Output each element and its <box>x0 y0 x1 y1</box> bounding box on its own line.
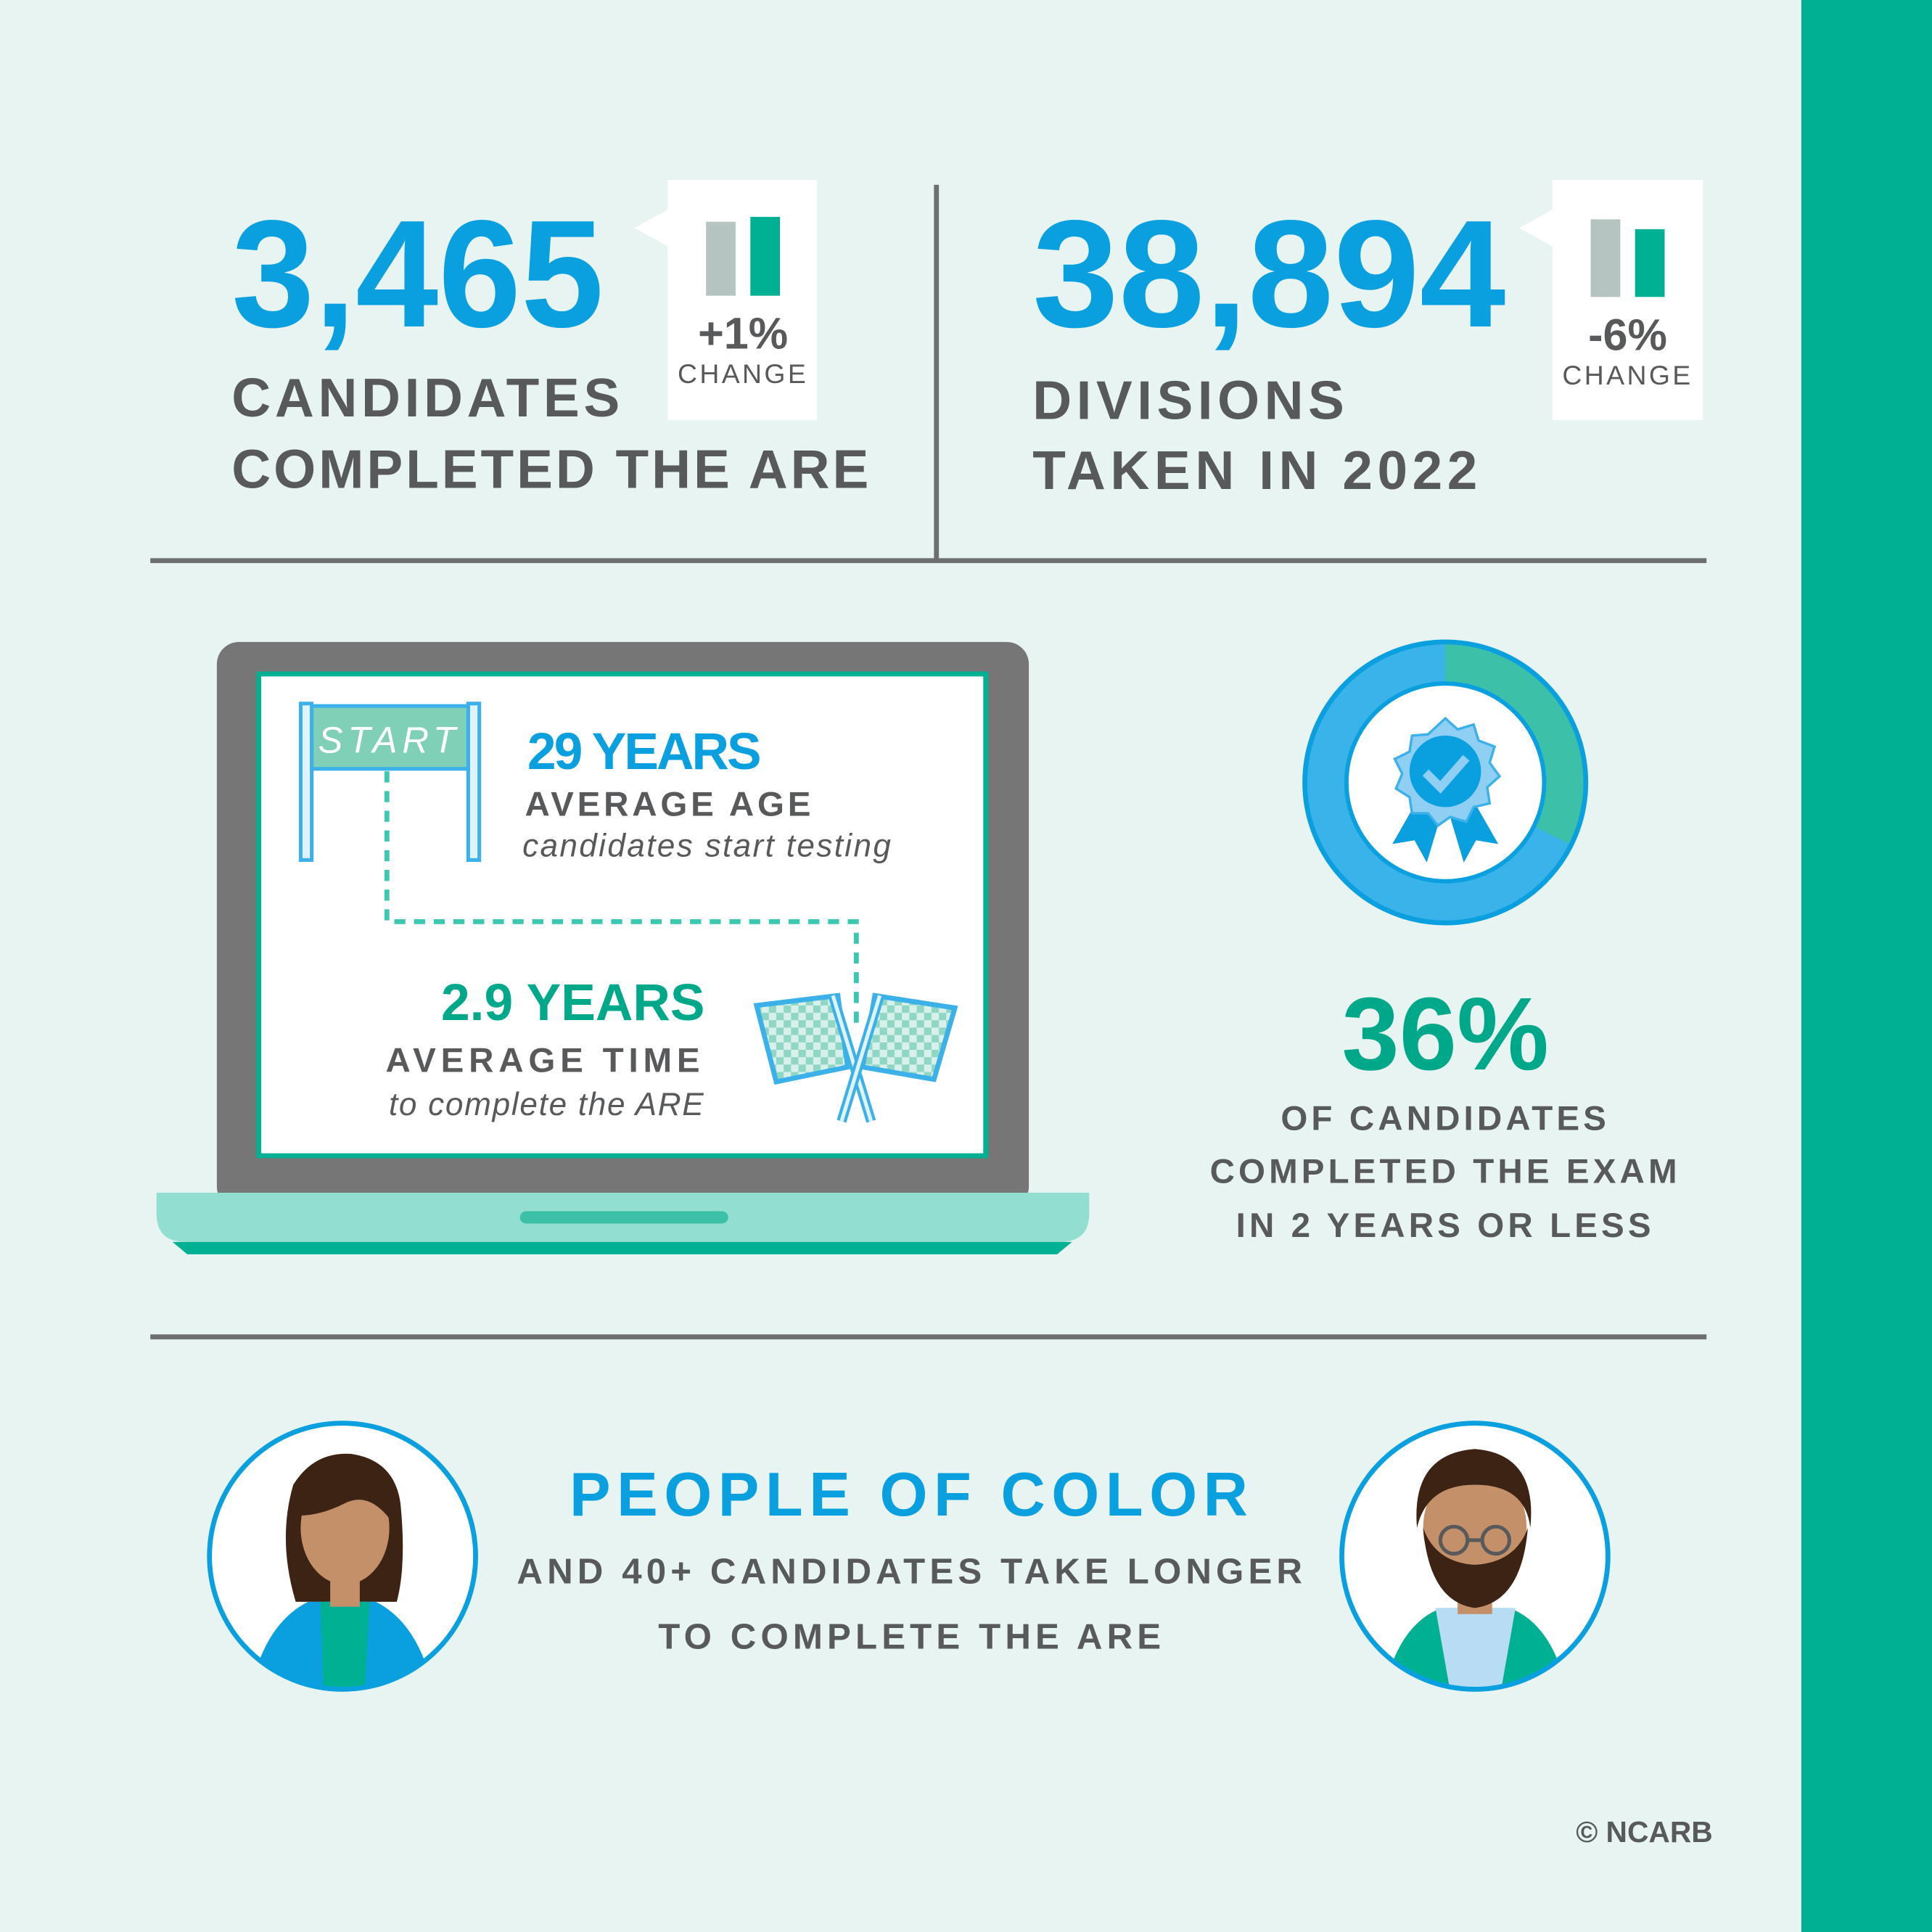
laptop <box>157 642 1089 1254</box>
text: 2.9 years <box>386 974 704 1122</box>
icon: start banner: START <box>318 720 461 761</box>
icon: woman avatar <box>210 1423 476 1713</box>
stat: candidates: COMPLETED THE ARE <box>231 439 875 500</box>
callout: +1% change <box>635 180 817 420</box>
callout: -6% change: -6% <box>1588 310 1667 359</box>
stat: candidates: CANDIDATES <box>231 367 626 428</box>
stat: divisions: TAKEN IN 2022 <box>1032 440 1484 501</box>
text: 29 years <box>522 723 892 863</box>
right green strip <box>1801 0 1932 1932</box>
text: 2.9 years: 2.9 YEARS <box>441 974 704 1032</box>
text: 29 years: 29 YEARS <box>527 723 762 781</box>
text: people of color: PEOPLE OF COLOR <box>570 1460 1254 1529</box>
icon: man avatar <box>1341 1423 1608 1713</box>
stat: divisions: 38,894 <box>1032 188 1505 359</box>
dashed path <box>387 771 856 1023</box>
text: people of color: AND 40+ CANDIDATES TAKE LONGER <box>517 1551 1307 1591</box>
text: 29 years: candidates start testing <box>522 828 892 863</box>
icon: award badge <box>1392 718 1500 863</box>
text: 29 years: AVERAGE AGE <box>525 785 815 823</box>
text: 36% of candidates: OF CANDIDATES <box>1281 1099 1610 1138</box>
text: 36% of candidates: COMPLETED THE EXAM <box>1210 1152 1681 1191</box>
text: 36% of candidates: IN 2 YEARS OR LESS <box>1236 1207 1655 1245</box>
icon: start banner <box>300 704 480 860</box>
text: 36% of candidates <box>1210 977 1681 1245</box>
stat: candidates: 3,465 <box>231 188 604 359</box>
icon: checkered flags <box>757 995 955 1121</box>
text: people of color: TO COMPLETE THE ARE <box>658 1616 1165 1656</box>
callout: +1% change: +1% <box>698 309 788 358</box>
text: 2.9 years: AVERAGE TIME <box>386 1042 704 1080</box>
stat: divisions <box>1032 188 1505 501</box>
callout: -6% change: CHANGE <box>1562 360 1693 390</box>
text: 2.9 years: to complete the ARE <box>389 1087 704 1122</box>
callout: +1% change: CHANGE <box>678 358 808 389</box>
credit: © NCARB <box>1576 1815 1713 1849</box>
donut chart: 36% <box>1325 663 1565 902</box>
text: people of color <box>517 1460 1307 1656</box>
stat: candidates <box>231 188 875 500</box>
text: 36% of candidates: 36% <box>1341 977 1549 1092</box>
callout: -6% change <box>1519 180 1703 420</box>
stat: divisions: DIVISIONS <box>1032 369 1350 430</box>
